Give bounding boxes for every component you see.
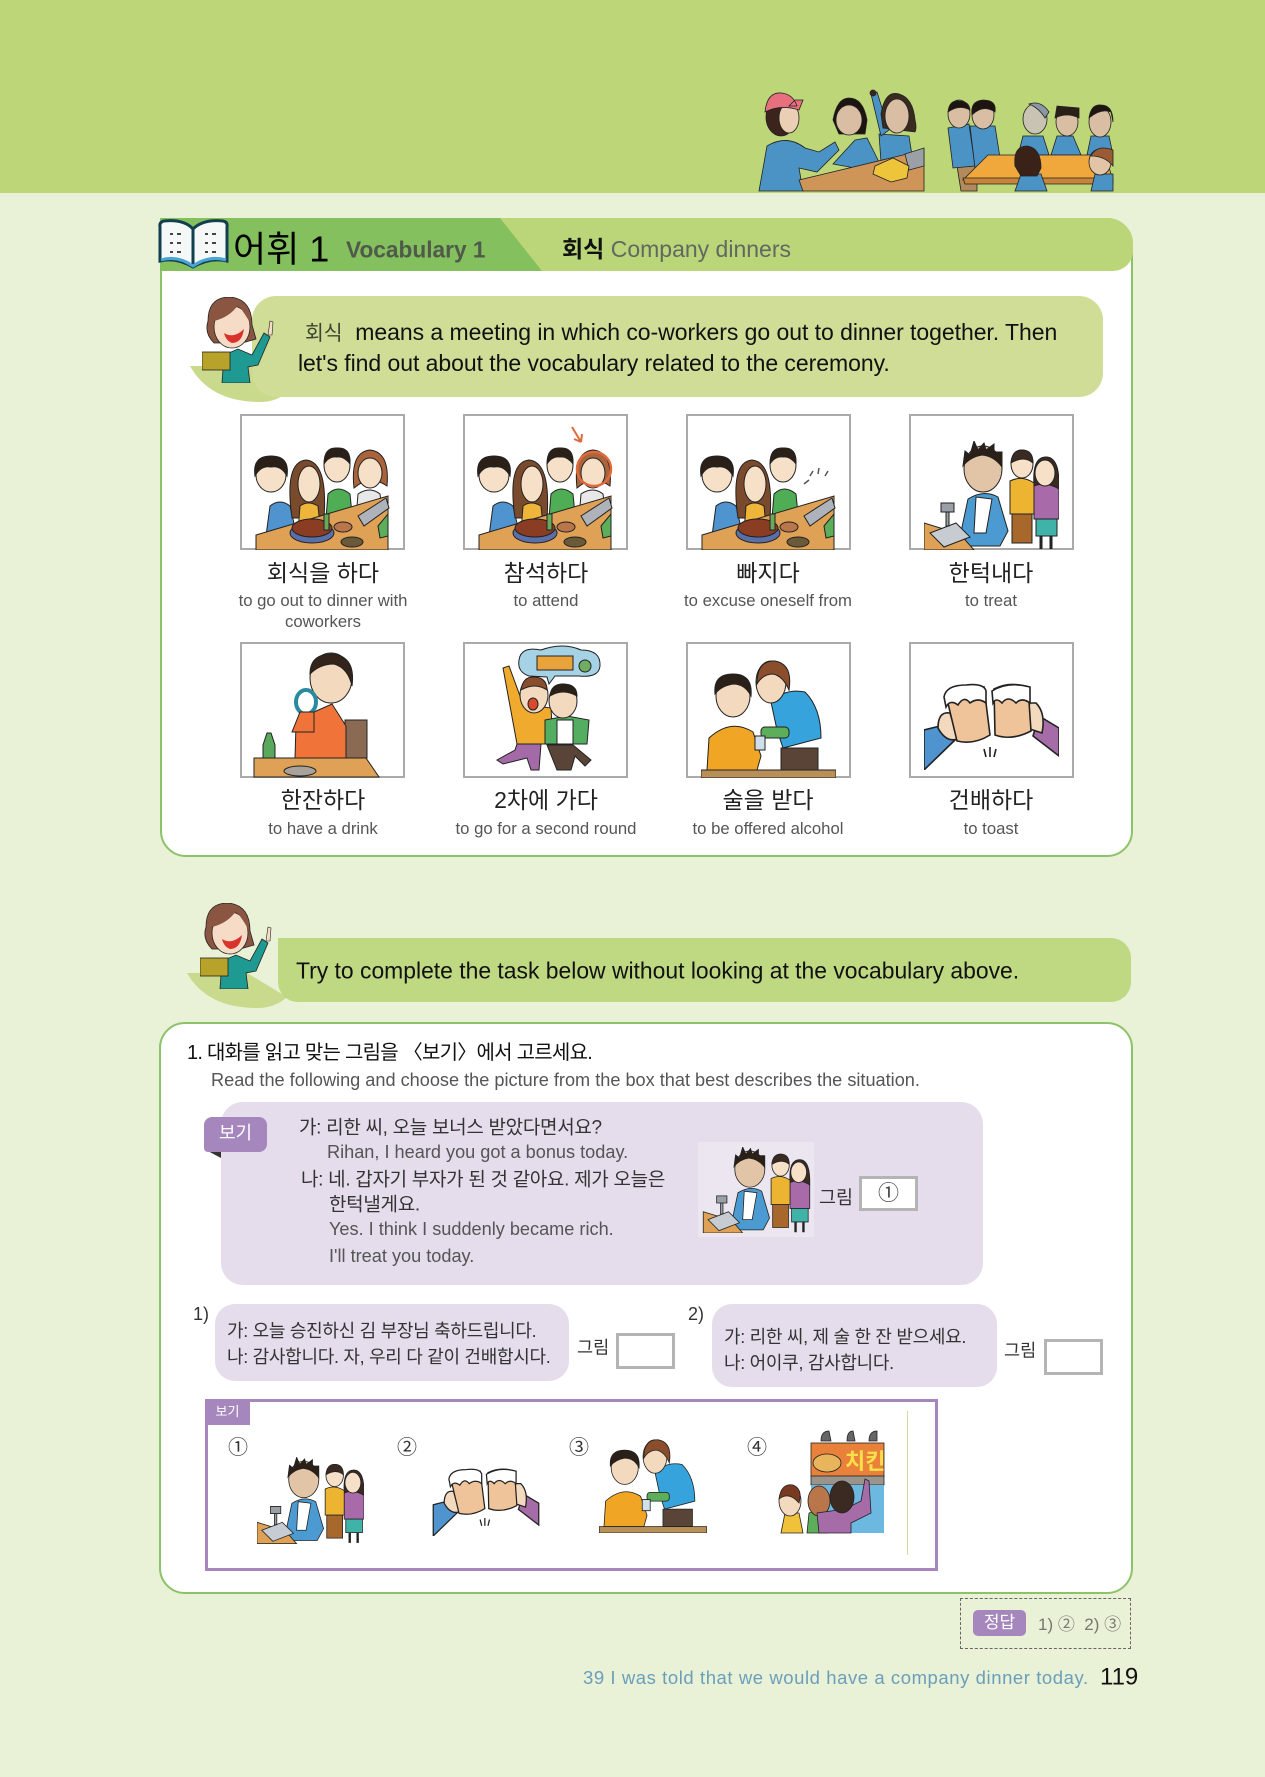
- image: going to a second round: [463, 642, 628, 778]
- answer key: [960, 1598, 1131, 1649]
- choice 4 image: [778, 1430, 885, 1534]
- vocab card: 술을 받다: [686, 642, 851, 838]
- speaker B line 2: 한턱낼게요.: [329, 1195, 420, 1216]
- vocab card: 참석하다: [463, 414, 628, 610]
- callout tail: [187, 973, 286, 1008]
- image: having a drink: [240, 642, 405, 778]
- darker title segment: [160, 218, 542, 271]
- instruction text: Try to complete the task below without looking at the vocabulary above.: [296, 957, 1019, 983]
- panel: exercise 1: [159, 1022, 1133, 1594]
- english meaning: to have a drink: [268, 819, 378, 838]
- image: team dinner: [240, 414, 405, 550]
- task instruction callout: [187, 903, 1131, 1008]
- answer tag: 정답: [984, 1613, 1015, 1632]
- image: treat: [698, 1142, 814, 1237]
- picture choices box: [205, 1399, 938, 1571]
- vocab card: 회식을 하다: [238, 414, 407, 631]
- choice 1 number: ①: [228, 1437, 248, 1459]
- korean word: 한잔하다: [281, 787, 365, 813]
- answer box: [859, 1176, 918, 1211]
- illustration: staff around a table: [948, 100, 1114, 192]
- english meaning: to toast: [964, 819, 1018, 838]
- answer box: ①: [878, 1182, 899, 1205]
- english meaning: to treat: [965, 591, 1017, 610]
- korean word: 한턱내다: [949, 560, 1033, 586]
- english meaning: to go for a second round: [456, 819, 636, 838]
- tag label: 보기: [219, 1123, 252, 1143]
- choice 2 image: [432, 1468, 540, 1536]
- icon: teacher: [202, 297, 274, 383]
- image: toasting: [909, 642, 1074, 778]
- speaker A line: 가: 리한 씨, 오늘 보너스 받았다면서요?: [299, 1118, 602, 1139]
- icon: teacher: [200, 903, 272, 989]
- callout bar: [278, 938, 1131, 1002]
- image: being offered alcohol: [686, 642, 851, 778]
- item 2 number: 2): [688, 1304, 704, 1324]
- heading: company dinners: 회식 Company dinners: [562, 236, 791, 262]
- english meaning: to go out to dinner with coworkers: [239, 591, 407, 631]
- speaker B translation 2: I'll treat you today.: [329, 1246, 474, 1266]
- choice 4 image: 치킨: [845, 1449, 885, 1474]
- item 1 line B: 나: 감사합니다. 자, 우리 다 같이 건배합시다.: [227, 1347, 550, 1367]
- choice 4 number: ④: [747, 1437, 767, 1459]
- question heading: 1. 대화를 읽고 맞는 그림을 〈보기〉에서 고르세요.: [187, 1042, 592, 1064]
- choices tag: 보기: [216, 1404, 239, 1419]
- item 1 line A: 가: 오늘 승진하신 김 부장님 축하드립니다.: [227, 1321, 536, 1341]
- callout line 2: let's find out about the vocabulary related to the ceremony.: [298, 350, 890, 376]
- answer label: 그림: [819, 1187, 853, 1208]
- answer text: 1) ② 2) ③: [1038, 1615, 1121, 1634]
- choice 2 number: ②: [397, 1437, 417, 1459]
- illustration: colleagues at a counter: [758, 90, 924, 192]
- callout text: [298, 319, 1057, 376]
- item 1 label: 그림: [577, 1338, 609, 1358]
- choice 3 number: ③: [569, 1437, 589, 1459]
- page number: 119: [1100, 1664, 1138, 1691]
- answer tag: [973, 1610, 1026, 1636]
- choices tag: [205, 1399, 250, 1425]
- heading: Vocabulary 1: Vocabulary 1: [346, 236, 486, 262]
- speaker B line: 나: 네. 갑자기 부자가 된 것 같아요. 제가 오늘은: [301, 1170, 665, 1191]
- english meaning: to be offered alcohol: [693, 819, 843, 838]
- item 1 number: 1): [193, 1304, 209, 1324]
- item 2 dialogue: [712, 1304, 997, 1387]
- example tag: [204, 1117, 267, 1158]
- callout line 1: 회식 means a meeting in which co-workers go out to dinner together. Then: [305, 319, 1057, 345]
- speaker B translation: Yes. I think I suddenly became rich.: [329, 1219, 614, 1239]
- question translation: Read the following and choose the picture from the box that best describes the situation.: [211, 1070, 920, 1090]
- vocab card: 한잔하다: [240, 642, 405, 838]
- example dialogue box: [221, 1102, 983, 1285]
- korean word: 빠지다: [736, 560, 800, 586]
- korean word: 참석하다: [504, 560, 588, 586]
- tag label: [204, 1117, 267, 1152]
- callout bubble: [252, 296, 1103, 397]
- choice 3 image: [599, 1439, 707, 1533]
- vocab card: 빠지다: [684, 414, 852, 610]
- section title bar: [160, 218, 1133, 271]
- korean word: 2차에 가다: [494, 787, 598, 813]
- heading: 어휘 1: 어휘 1: [233, 228, 329, 269]
- vocab card: 건배하다: [909, 642, 1074, 838]
- panel frame: [160, 218, 1133, 857]
- item 1 dialogue: [215, 1304, 569, 1381]
- korean word: 회식을 하다: [267, 560, 379, 586]
- footer sentence: 39 I was told that we would have a company dinner today.: [583, 1667, 1089, 1688]
- item 2 answer box: [1044, 1339, 1103, 1375]
- icon: open book: [158, 219, 229, 269]
- image: attending: [463, 414, 628, 550]
- callout tail: [190, 366, 280, 402]
- image: treating: [909, 414, 1074, 550]
- choice divider: [907, 1411, 908, 1555]
- tag fold: [204, 1149, 221, 1158]
- intro callout: [190, 296, 1103, 402]
- image: excusing oneself: [686, 414, 851, 550]
- item 2 line A: 가: 리한 씨, 제 술 한 잔 받으세요.: [724, 1327, 966, 1347]
- item 2 line B: 나: 어이쿠, 감사합니다.: [724, 1353, 894, 1373]
- item 1 answer box: [616, 1333, 675, 1369]
- speaker A translation: Rihan, I heard you got a bonus today.: [327, 1142, 628, 1162]
- item 2 label: 그림: [1004, 1340, 1036, 1360]
- vocab card: 2차에 가다: [456, 642, 636, 838]
- vocab card: 한턱내다: [909, 414, 1074, 610]
- korean word: 건배하다: [949, 787, 1033, 813]
- english meaning: to attend: [514, 591, 578, 610]
- panel: vocabulary 1: [158, 218, 1133, 857]
- korean word: 술을 받다: [722, 787, 814, 813]
- header band: [0, 0, 1265, 193]
- choice 1 image: [257, 1457, 364, 1544]
- english meaning: to excuse oneself from: [684, 591, 852, 610]
